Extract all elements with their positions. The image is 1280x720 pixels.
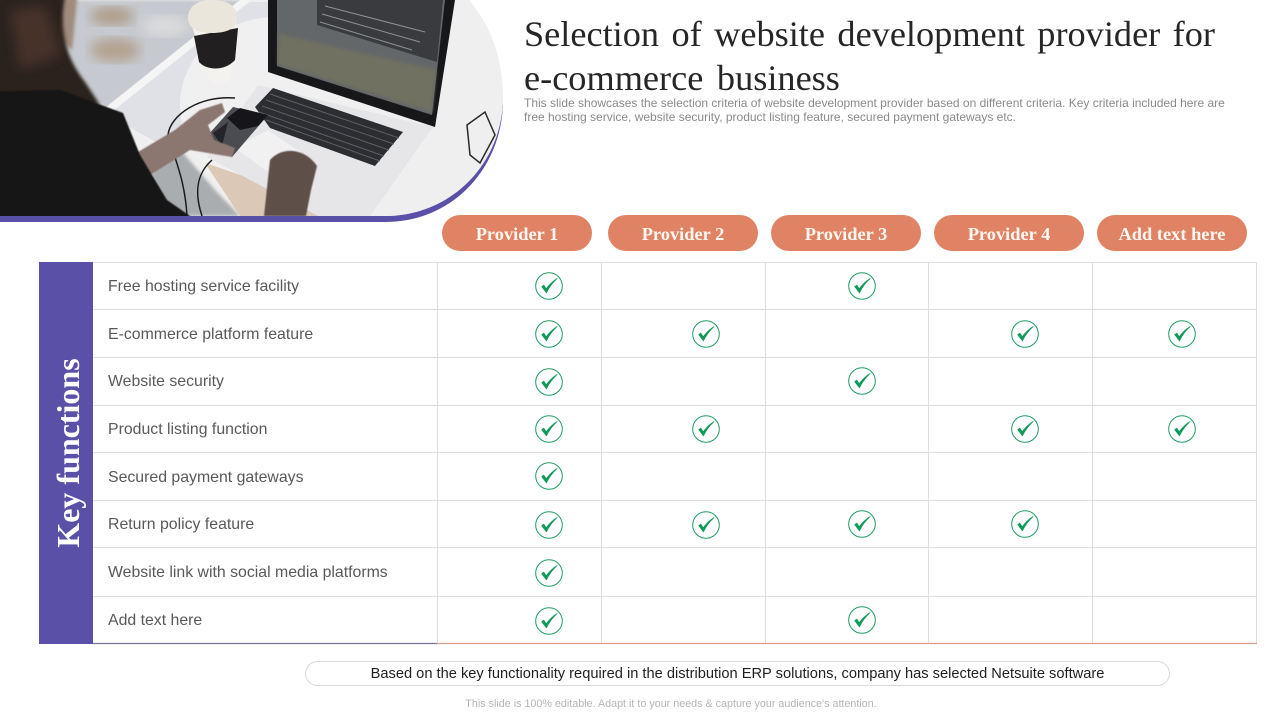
title xyxy=(524,14,1215,98)
key functions side bar xyxy=(39,262,93,644)
comparison table xyxy=(39,262,1257,644)
row label: hosting: Free hosting service facility xyxy=(108,278,299,295)
add text pill xyxy=(1097,215,1247,251)
side bar label: Key functions xyxy=(50,358,86,548)
footer note: This slide is 100% editable. Adapt it to your needs & capture your audience's attention. xyxy=(465,698,877,710)
person hair xyxy=(58,0,78,50)
provider 2 pill xyxy=(608,215,758,251)
right hand xyxy=(264,151,317,216)
wood table edge xyxy=(205,163,318,216)
provider headers xyxy=(442,215,1247,251)
glasses xyxy=(467,112,495,163)
description text: This slide showcases the selection criteria of website development provider based on different criteria. Key criteria included here are xyxy=(524,96,1225,110)
provider 3 pill: Provider 3 xyxy=(805,224,887,244)
conclusion callout xyxy=(305,661,1170,686)
row label: product listing: Product listing function xyxy=(108,421,267,438)
coffee cup xyxy=(192,22,236,36)
row label: social media: Website link with social media platforms xyxy=(108,564,388,581)
row label: e-commerce: E-commerce platform feature xyxy=(108,326,313,343)
laptop base xyxy=(207,85,433,216)
person body xyxy=(0,90,190,216)
row label: return policy: Return policy feature xyxy=(108,516,254,533)
title: Selection of website development provider for xyxy=(524,14,1215,54)
provider 1 pill xyxy=(442,215,592,251)
row label: add text: Add text here xyxy=(108,612,202,629)
conclusion callout: Based on the key functionality required in the distribution ERP solutions, company has selected Netsuite software xyxy=(371,666,1104,682)
row label: payment: Secured payment gateways xyxy=(108,469,304,486)
description text: free hosting service, website security, product listing feature, secured payment gateways etc. xyxy=(524,110,1016,124)
laptop screen xyxy=(268,0,455,127)
phone xyxy=(208,107,268,157)
floor gap xyxy=(152,153,240,216)
title: e-commerce business xyxy=(524,58,840,98)
cable xyxy=(168,98,235,216)
table grid xyxy=(93,262,1257,644)
provider 4 pill xyxy=(934,215,1084,251)
provider 4 pill: Provider 4 xyxy=(968,224,1050,244)
provider 1 pill: Provider 1 xyxy=(476,224,558,244)
window background xyxy=(60,0,245,110)
add text pill: Add text here xyxy=(1119,224,1225,244)
provider 2 pill: Provider 2 xyxy=(642,224,724,244)
photo: person working on a laptop xyxy=(0,0,503,222)
left hand xyxy=(133,103,235,175)
provider 3 pill xyxy=(771,215,921,251)
description text xyxy=(524,96,1225,124)
row label: security: Website security xyxy=(108,373,224,390)
keyboard xyxy=(255,88,403,166)
